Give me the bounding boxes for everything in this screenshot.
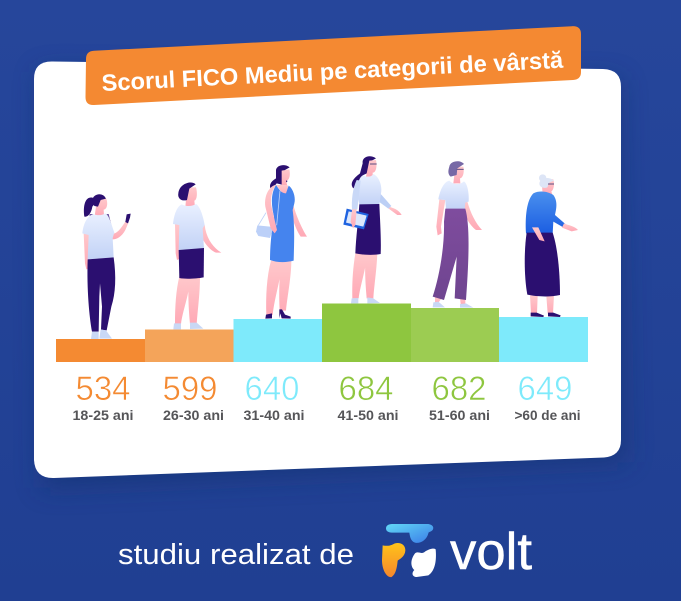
scores: 640 xyxy=(244,370,300,408)
bar chart: score podium xyxy=(56,304,588,362)
volt wordmark: volt xyxy=(450,523,533,581)
scores: 682 xyxy=(432,370,486,408)
card shadow xyxy=(40,72,626,488)
scores: 534 xyxy=(76,370,130,408)
figure: woman in skirt, 26-30 xyxy=(173,182,221,329)
age labels: 31-40 ani xyxy=(244,407,304,423)
scores: 649 xyxy=(518,370,572,408)
age labels: 51-60 ani xyxy=(429,407,490,423)
age labels: 26-30 ani xyxy=(163,407,224,423)
age labels: 41-50 ani xyxy=(338,407,398,423)
age labels xyxy=(72,407,580,423)
title: Scorul FICO Mediu pe categorii de vârstă xyxy=(101,47,565,96)
panel: white card xyxy=(34,61,621,478)
figure: grandmother in blue sweater, over 60 xyxy=(525,174,578,317)
figure: woman in blue dress, 31-40 xyxy=(256,165,307,319)
title banner xyxy=(86,26,581,105)
age labels: 18-25 ani xyxy=(72,407,134,423)
figure: older woman in purple trousers, 51-60 xyxy=(433,161,482,308)
scores: 684 xyxy=(338,370,394,408)
figure: young woman with phone, 18-25 xyxy=(82,194,131,339)
icon: volt logo mark xyxy=(382,524,436,577)
age labels: >60 de ani xyxy=(514,407,580,423)
footer text: studiu realizat de xyxy=(118,539,354,571)
figure: woman with clipboard, 41-50 xyxy=(343,156,402,303)
scores: 599 xyxy=(162,370,218,408)
scores xyxy=(76,370,572,408)
